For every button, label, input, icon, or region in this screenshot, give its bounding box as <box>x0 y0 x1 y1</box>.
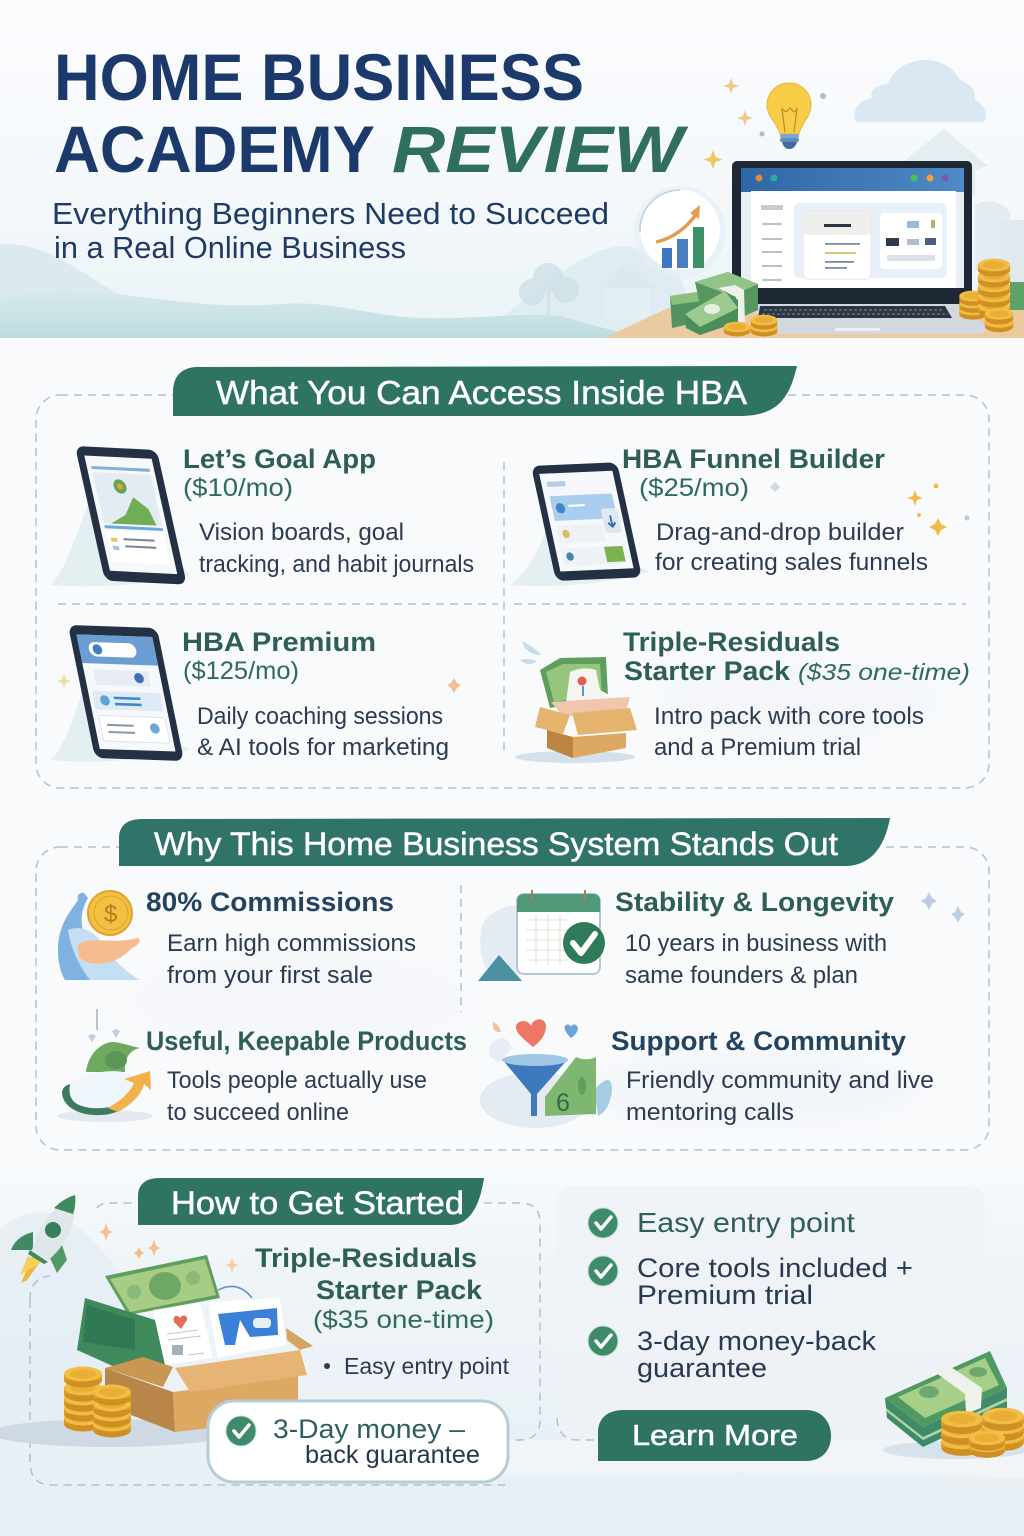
title: ACADEMY <box>54 112 375 186</box>
icon: calendar with check <box>478 890 605 981</box>
banner: how to get started <box>138 1178 484 1225</box>
callout: money-back guarantee: back guarantee <box>305 1441 480 1469</box>
feature: useful products: Useful, Keepable Products <box>146 1026 467 1056</box>
header band <box>0 0 1024 338</box>
feature: support and community: mentoring calls <box>626 1099 794 1126</box>
feature: 80% commissions <box>58 887 416 989</box>
card: HBA Premium: HBA Premium <box>182 627 376 657</box>
panel: why this system stands out <box>36 818 989 1150</box>
card: HBA Funnel Builder: Drag-and-drop builder <box>656 519 904 546</box>
card: HBA Premium: & AI tools for marketing <box>197 734 449 761</box>
feature: support and community <box>480 1019 934 1128</box>
feature: stability and longevity: Stability & Longevity <box>615 887 894 917</box>
card: Triple-Residuals Starter Pack: Intro pack with core tools <box>654 703 924 730</box>
icon: cash and coins bottom right <box>883 1351 1024 1459</box>
icon: starter pack box with cash <box>0 1255 313 1447</box>
benefit: easy entry: Easy entry point <box>637 1207 855 1238</box>
icon: money bowl with arrow <box>57 1009 153 1122</box>
feature: 80% commissions: from your first sale <box>167 962 373 989</box>
feature: support and community: Support & Community <box>611 1026 906 1056</box>
benefit: guarantee: guarantee <box>637 1353 767 1383</box>
icon: funnel with heart and money: 6 <box>556 1089 570 1117</box>
callout: money-back guarantee <box>208 1401 508 1482</box>
banner: what you can access: What You Can Access Inside HBA <box>216 374 747 411</box>
card: Triple-Residuals Starter Pack: ($35 one-time) <box>798 659 970 685</box>
icon: light bulb <box>704 78 826 169</box>
subtitle: in a Real Online Business <box>54 230 406 265</box>
icon: coins right <box>959 259 1024 332</box>
banner: why this system <box>119 818 890 866</box>
card: Let's Goal App <box>50 444 474 586</box>
feature: support and community: Friendly community and live <box>626 1067 934 1094</box>
icon: growth chart <box>634 186 726 278</box>
card: HBA Funnel Builder <box>510 444 970 586</box>
footer background <box>0 1160 1024 1536</box>
text: starter pack offer: Starter Pack <box>316 1275 483 1305</box>
feature: stability and longevity: 10 years in business with <box>625 930 887 957</box>
icon: cash stack left <box>670 272 758 335</box>
card: HBA Funnel Builder: for creating sales funnels <box>655 549 928 576</box>
card: Triple-Residuals Starter Pack: Triple-Residuals <box>623 627 840 657</box>
icon: funnel with heart and money <box>480 1019 612 1128</box>
card: Let's Goal App: Let’s Goal App <box>183 444 376 474</box>
callout: money-back guarantee: 3-Day money – <box>273 1414 465 1444</box>
card: Triple-Residuals Starter Pack: Starter Pack <box>624 656 791 686</box>
feature: stability and longevity <box>478 887 965 989</box>
text: starter pack offer: Triple-Residuals <box>255 1243 477 1273</box>
benefit: core tools: Premium trial <box>637 1280 813 1310</box>
background cloud <box>854 60 986 122</box>
icon: funnel builder tablet <box>510 462 650 586</box>
banner: what you can access <box>173 366 797 416</box>
card: Triple-Residuals Starter Pack <box>515 627 970 763</box>
button: learn more: Learn More <box>632 1420 798 1452</box>
subtitle <box>52 196 609 265</box>
title <box>54 40 688 186</box>
card: HBA Premium <box>50 625 461 762</box>
icon: coins small <box>724 315 777 336</box>
title: HOME BUSINESS <box>54 40 584 114</box>
feature: 80% commissions: 80% Commissions <box>146 887 394 917</box>
icon: goal app tablet <box>50 446 190 586</box>
card: Let's Goal App: Vision boards, goal <box>199 519 404 546</box>
text: starter pack offer: ($35 one-time) <box>313 1306 494 1334</box>
icon: starter box <box>515 641 637 763</box>
icon: laptop and desk <box>604 161 1024 338</box>
benefit: core tools: Core tools included + <box>637 1253 913 1283</box>
icon: coin stacks <box>64 1366 131 1438</box>
feature: useful products: to succeed online <box>167 1099 349 1126</box>
benefit: guarantee: 3-day money-back <box>637 1326 877 1356</box>
text: starter pack offer: Easy entry point <box>344 1353 510 1379</box>
title: REVIEW <box>392 112 688 186</box>
feature: 80% commissions: Earn high commissions <box>167 930 416 957</box>
banner: how to get started: How to Get Started <box>171 1185 464 1221</box>
benefit: guarantee <box>588 1326 877 1383</box>
soft background blobs <box>130 660 940 1130</box>
benefit: core tools <box>588 1253 913 1310</box>
text: starter pack offer <box>255 1243 510 1379</box>
card: HBA Funnel Builder: ($25/mo) <box>639 474 749 502</box>
white strip divider <box>0 338 1024 1168</box>
panel: what you can access <box>36 366 989 788</box>
card: HBA Funnel Builder: HBA Funnel Builder <box>622 444 886 474</box>
icon: premium tablet <box>50 625 190 762</box>
feature: useful products: Tools people actually use <box>167 1067 427 1094</box>
card: HBA Premium: ($125/mo) <box>183 657 299 685</box>
card: HBA Premium: Daily coaching sessions <box>197 703 443 730</box>
card: Let's Goal App: ($10/mo) <box>183 474 293 502</box>
button: learn more <box>598 1410 831 1461</box>
icon: coin in hand <box>58 891 140 980</box>
panel: benefits and call to action <box>557 1186 985 1461</box>
card: Let's Goal App: tracking, and habit journals <box>199 551 474 578</box>
panel: how to get started <box>0 1178 540 1485</box>
decorative tree and house <box>519 262 656 319</box>
subtitle: Everything Beginners Need to Succeed <box>52 196 609 231</box>
banner: why this system: Why This Home Business System Stands Out <box>154 826 838 862</box>
feature: stability and longevity: same founders & plan <box>625 962 858 989</box>
icon: coin in hand: $ <box>104 901 117 928</box>
feature: useful products <box>57 1009 467 1126</box>
icon: rocket <box>11 1195 238 1283</box>
decorative sparkles <box>907 484 947 536</box>
card: Triple-Residuals Starter Pack: and a Premium trial <box>654 734 861 761</box>
